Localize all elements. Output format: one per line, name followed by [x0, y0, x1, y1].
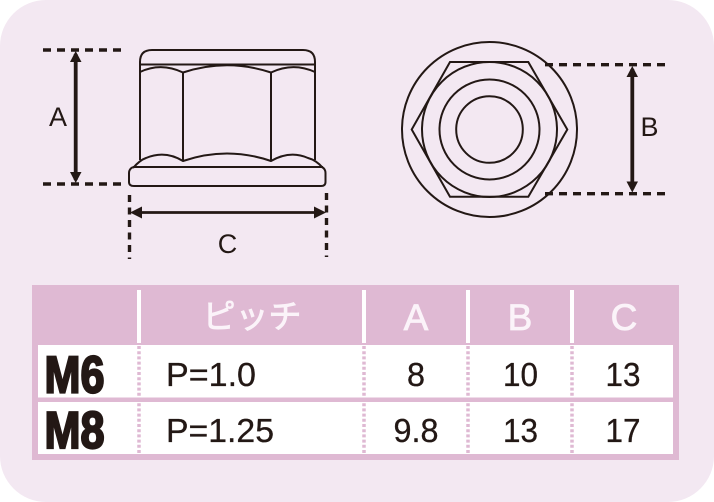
dimension B	[545, 65, 665, 194]
dimension A: A	[49, 102, 67, 132]
dimension C	[130, 193, 326, 259]
dimension C: C	[218, 229, 237, 259]
row: M8: 17	[606, 413, 640, 450]
table header labels: B	[508, 297, 532, 338]
row: M8	[38, 402, 673, 460]
row: M6: 10	[503, 357, 538, 394]
table header labels	[202, 297, 637, 338]
side view diagram	[43, 50, 326, 259]
table header labels: ピッチ	[202, 298, 302, 335]
row: M6: 13	[606, 357, 640, 394]
table header labels: A	[404, 297, 429, 338]
front view diagram	[402, 42, 665, 217]
row: M8: 9.8	[394, 413, 438, 450]
row: M6: P=1.0	[166, 357, 256, 394]
row: M6: 8	[407, 357, 425, 394]
dimension A	[43, 50, 121, 184]
row: M6: M6	[44, 346, 104, 404]
dimension B: B	[640, 112, 659, 142]
table	[32, 285, 679, 460]
column separators	[139, 290, 572, 454]
row: M8: 13	[503, 413, 538, 450]
table header labels: C	[611, 297, 637, 338]
table frame and header band	[32, 285, 679, 460]
nut side outline	[129, 50, 326, 186]
row: M6	[38, 345, 673, 404]
nut front outline	[402, 42, 577, 217]
row: M8: M8	[44, 402, 104, 460]
row: M8: P=1.25	[166, 413, 274, 450]
